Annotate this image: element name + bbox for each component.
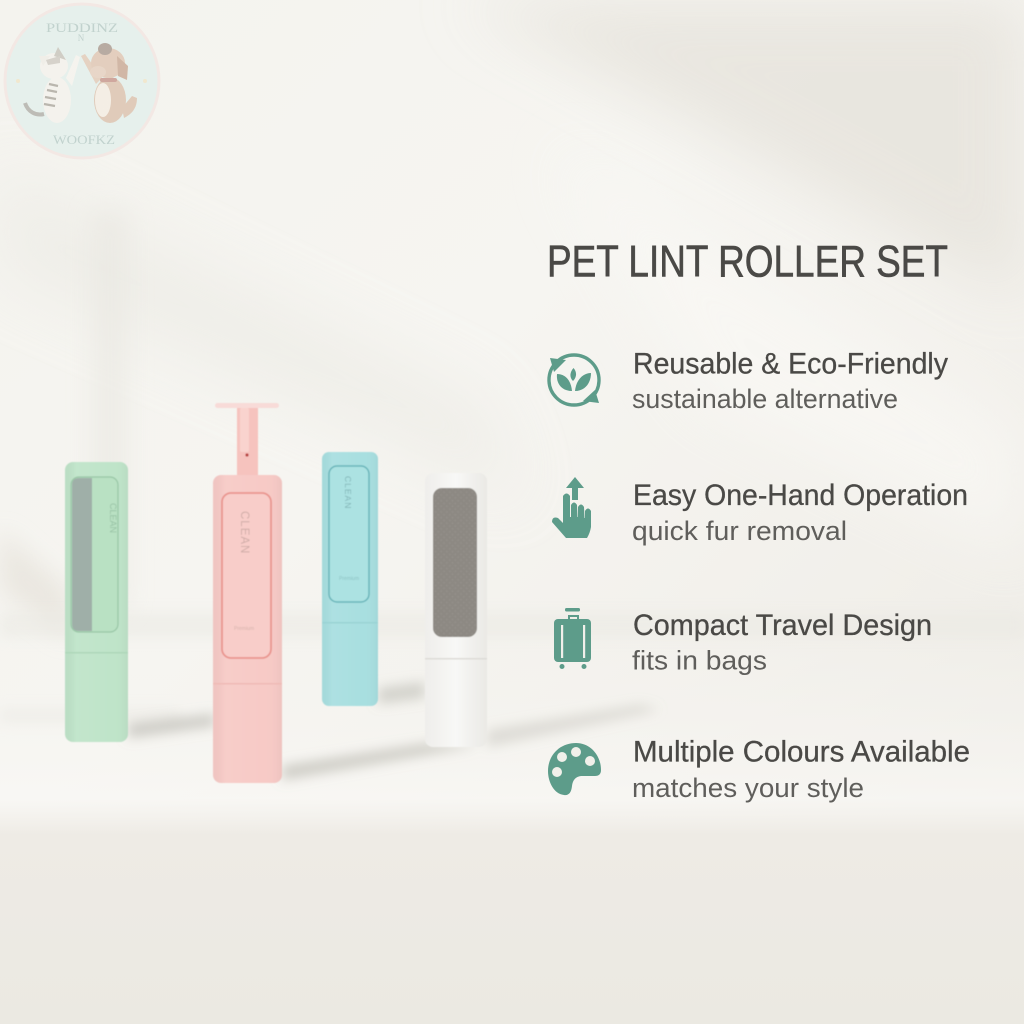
subtext: fits in bags — [632, 646, 767, 676]
logo text: WOOFKZ — [53, 132, 115, 147]
feature: easy one-hand operation — [552, 477, 968, 546]
subtext: sustainable alternative — [632, 384, 898, 414]
icon: hand with up arrow — [552, 477, 591, 538]
pink roller — [213, 403, 282, 783]
subtext: matches your style — [632, 773, 864, 803]
heading: Easy One-Hand Operation — [633, 479, 968, 512]
icon: paint palette — [548, 743, 601, 795]
logo text: N — [78, 33, 85, 43]
lint pad — [72, 478, 92, 631]
pull handle — [215, 403, 279, 475]
heading: Compact Travel Design — [633, 609, 932, 642]
heading: Multiple Colours Available — [633, 736, 970, 768]
product label: CLEAN — [238, 511, 250, 554]
roller window — [71, 477, 118, 632]
subtext: quick fur removal — [632, 516, 847, 546]
logo text — [46, 20, 118, 147]
heading: Reusable & Eco-Friendly — [633, 348, 948, 380]
white roller — [425, 473, 487, 747]
blue roller — [322, 452, 378, 706]
logo cat — [25, 47, 80, 123]
green roller — [65, 462, 128, 742]
feature: multiple colours available — [548, 736, 970, 803]
icon: recycling leaf — [549, 355, 599, 405]
pink roller: Premium — [234, 626, 254, 632]
product shadows on the floor — [128, 682, 660, 780]
feature: reusable and eco-friendly — [549, 348, 948, 414]
product label: CLEAN — [108, 503, 118, 533]
lint pad — [433, 488, 477, 637]
logo text: PUDDINZ — [46, 20, 118, 35]
logo dog — [81, 43, 137, 123]
product label: CLEAN — [343, 476, 353, 509]
roller window — [329, 466, 369, 602]
blue roller: Premium — [339, 576, 359, 582]
icon: suitcase — [554, 608, 591, 669]
title: PET LINT ROLLER SET — [547, 238, 948, 286]
feature: compact travel design — [554, 608, 932, 676]
roller window — [222, 493, 271, 658]
logo badge: Puddinz N Woofkz — [5, 4, 159, 158]
